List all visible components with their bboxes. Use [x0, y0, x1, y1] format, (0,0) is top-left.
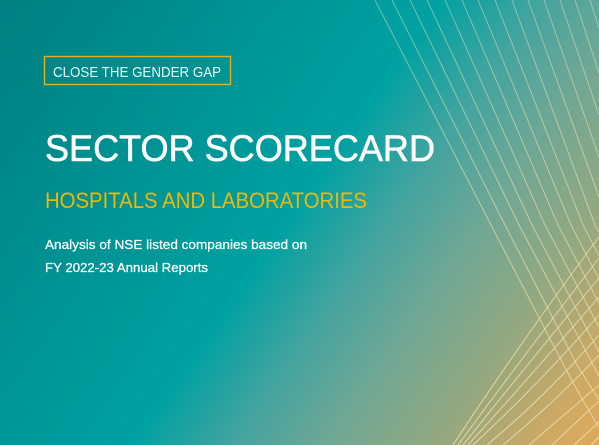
description line 2: FY 2022-23 Annual Reports — [45, 260, 209, 275]
description — [45, 237, 307, 275]
tag text: CLOSE THE GENDER GAP — [53, 64, 221, 81]
tag border — [44, 56, 230, 84]
ascending line pattern — [453, 237, 599, 445]
title: SECTOR SCORECARD — [45, 127, 435, 169]
subtitle: HOSPITALS AND LABORATORIES — [45, 188, 367, 213]
tag: close the gender gap — [44, 56, 230, 84]
description line 1: Analysis of NSE listed companies based on — [45, 237, 307, 252]
descending line pattern — [375, 0, 599, 428]
